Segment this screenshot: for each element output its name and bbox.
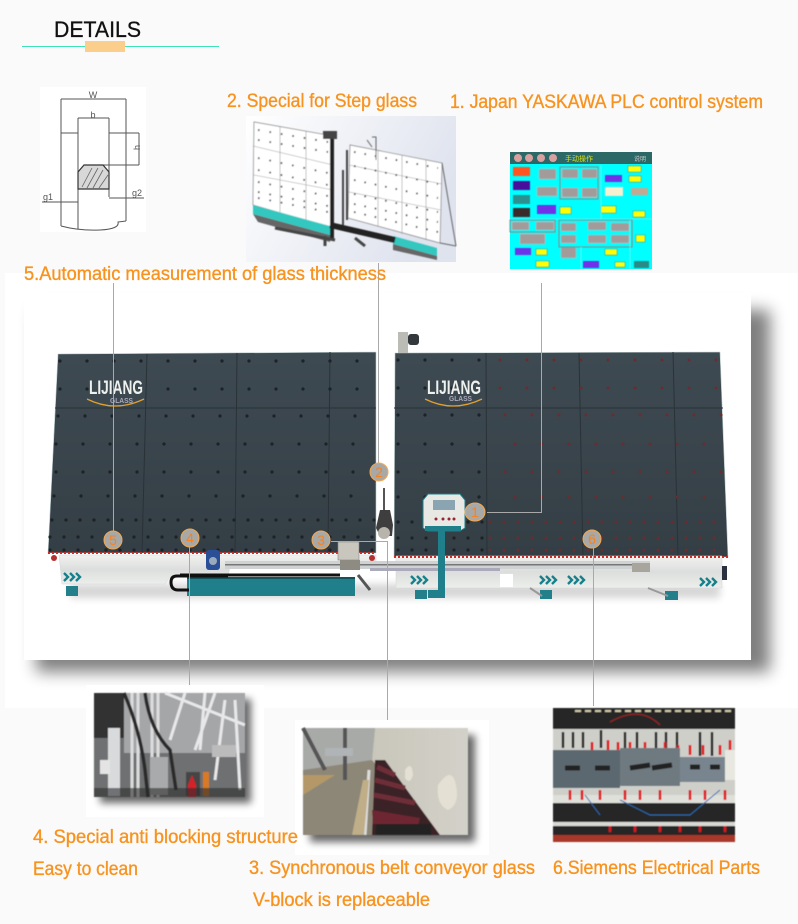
badge 1 [465, 503, 485, 521]
chevrons [64, 573, 716, 586]
callout badges [104, 463, 601, 549]
label 5: automatic measurement: 5.Automatic measurement of glass thickness [24, 264, 386, 285]
badge 5: 5 [109, 532, 117, 548]
image: step glass machine drawing [246, 116, 456, 262]
ground shadow under machine [70, 584, 720, 598]
image: touch-screen PLC control panel: 说明 [634, 155, 646, 163]
photo 4: anti blocking structure [86, 685, 264, 817]
photo 6: Siemens electrical parts [553, 708, 735, 842]
operator console [423, 494, 465, 598]
diagram: glass spacer cross-section: W [89, 90, 98, 100]
heading: DETAILS: DETAILS [54, 17, 141, 42]
moving carriage with drive [171, 542, 370, 596]
photo 3: synchronous belt conveyor [295, 720, 489, 855]
badge 2: 2 [375, 464, 383, 480]
diagram: glass spacer cross-section: g1 [43, 192, 53, 202]
badge 6: 6 [588, 531, 596, 547]
main panel: machine photo [5, 263, 798, 720]
badge 3 [312, 531, 330, 549]
logo: LIJIANG left: GLASS [110, 398, 133, 405]
label 4: anti blocking structure [33, 827, 298, 880]
logo: LIJIANG right: LIJIANG [427, 378, 481, 399]
logo: LIJIANG right: GLASS [449, 396, 472, 403]
logo: LIJIANG left [87, 378, 144, 406]
heading: DETAILS [22, 17, 219, 52]
badge 1: 1 [471, 504, 479, 520]
diagram: glass spacer cross-section: g2 [132, 188, 142, 198]
diagram: glass spacer cross-section [40, 87, 146, 232]
label 2: special for step glass: 2. Special for Step glass [227, 91, 417, 112]
left glass panel [48, 352, 376, 553]
sealing head between panels [376, 488, 393, 539]
leader lines [114, 263, 594, 720]
label 4: anti blocking structure: Easy to clean [33, 859, 138, 880]
right glass panel [394, 352, 728, 557]
badge 6 [583, 530, 601, 548]
diagram: glass spacer cross-section: b [90, 110, 96, 120]
badge 5 [104, 531, 122, 549]
diagram: glass spacer cross-section: h [132, 145, 142, 150]
label 3: synchronous belt: V-block is replaceable [253, 890, 430, 911]
label 3: synchronous belt: 3. Synchronous belt conveyor glass [249, 858, 535, 879]
label 3: synchronous belt [249, 858, 535, 911]
label 6: Siemens parts: 6.Siemens Electrical Parts [553, 858, 760, 879]
badge 4 [181, 529, 199, 547]
top mounted unit [398, 332, 419, 353]
base frames and rails [48, 553, 728, 600]
logo: LIJIANG right [425, 378, 482, 406]
badge 3: 3 [317, 532, 325, 548]
logo: LIJIANG left: LIJIANG [89, 378, 143, 399]
label 1: PLC control system: 1. Japan YASKAWA PLC control system [450, 92, 763, 113]
image: touch-screen PLC control panel: 手动操作 [565, 154, 593, 163]
badge 4: 4 [186, 530, 194, 546]
badge 2 [370, 463, 388, 481]
label 4: anti blocking structure: 4. Special anti blocking structure [33, 827, 298, 848]
image: touch-screen PLC control panel [510, 152, 652, 269]
